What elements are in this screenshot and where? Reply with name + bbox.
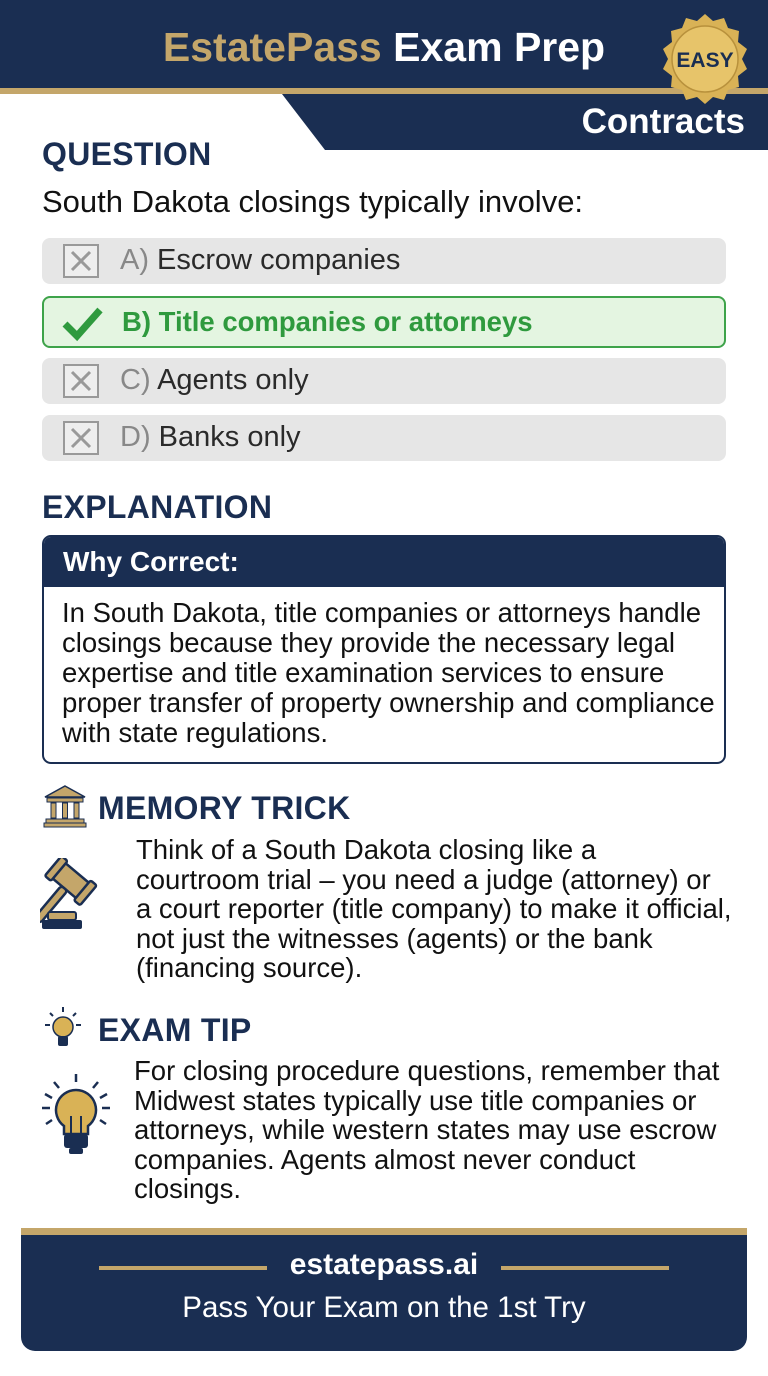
header band bbox=[0, 0, 768, 150]
memory trick text: (financing source). bbox=[136, 952, 362, 983]
heading: question: QUESTION bbox=[42, 136, 212, 172]
option A bbox=[42, 238, 726, 284]
option D: D) Banks only bbox=[120, 421, 301, 453]
option D bbox=[42, 415, 726, 461]
option C bbox=[42, 358, 726, 404]
exam tip text: attorneys, while western states may use escrow bbox=[134, 1114, 716, 1145]
panel header: Why Correct: bbox=[63, 546, 239, 577]
footer divider lines bbox=[99, 1266, 267, 1270]
option B correct bbox=[42, 296, 726, 348]
exam tip text: closings. bbox=[134, 1173, 241, 1204]
memory trick text: Think of a South Dakota closing like a bbox=[136, 834, 596, 865]
title: EstatePass Exam Prep bbox=[163, 24, 605, 70]
badge: EASY bbox=[663, 14, 747, 104]
footer bbox=[21, 1228, 747, 1351]
icon: courthouse bbox=[44, 785, 86, 828]
footer site: estatepass.ai bbox=[290, 1248, 478, 1281]
explanation text: proper transfer of property ownership and compliance bbox=[62, 687, 715, 718]
question text: South Dakota closings typically involve: bbox=[42, 184, 583, 219]
explanation text: with state regulations. bbox=[62, 717, 328, 748]
option C: C) Agents only bbox=[120, 364, 309, 396]
explanation text: closings because they provide the necessary legal bbox=[62, 627, 675, 658]
heading: explanation: EXPLANATION bbox=[42, 489, 272, 525]
badge: EASY: EASY bbox=[676, 49, 734, 72]
footer tagline: Pass Your Exam on the 1st Try bbox=[182, 1291, 586, 1324]
memory trick text: not just the witnesses (agents) or the bank bbox=[136, 922, 653, 954]
icon: large lightbulb bbox=[42, 1074, 110, 1154]
memory trick text: courtroom trial – you need a judge (attorney) or bbox=[136, 864, 711, 894]
option B correct: B) Title companies or attorneys bbox=[122, 306, 533, 337]
icon: gavel bbox=[40, 858, 98, 929]
heading: exam tip: EXAM TIP bbox=[98, 1012, 252, 1048]
panel: why correct bbox=[42, 535, 726, 764]
exam tip text: Midwest states typically use title companies or bbox=[134, 1084, 696, 1116]
exam tip text: companies. Agents almost never conduct bbox=[134, 1144, 635, 1174]
exam tip text: For closing procedure questions, remember that bbox=[134, 1055, 719, 1086]
icon: small lightbulb bbox=[45, 1007, 81, 1046]
panel header bbox=[44, 537, 724, 587]
explanation text: In South Dakota, title companies or attorneys handle bbox=[62, 597, 701, 628]
memory trick text bbox=[136, 834, 732, 983]
memory trick text: a court reporter (title company) to make it official, bbox=[136, 893, 732, 924]
exam tip text bbox=[134, 1055, 720, 1204]
category: Contracts: Contracts bbox=[582, 102, 745, 141]
explanation text: expertise and title examination services to ensure bbox=[62, 657, 664, 688]
explanation text bbox=[62, 597, 715, 748]
option A: A) Escrow companies bbox=[120, 244, 400, 276]
answer options bbox=[42, 238, 726, 461]
heading: memory trick: MEMORY TRICK bbox=[98, 790, 350, 826]
